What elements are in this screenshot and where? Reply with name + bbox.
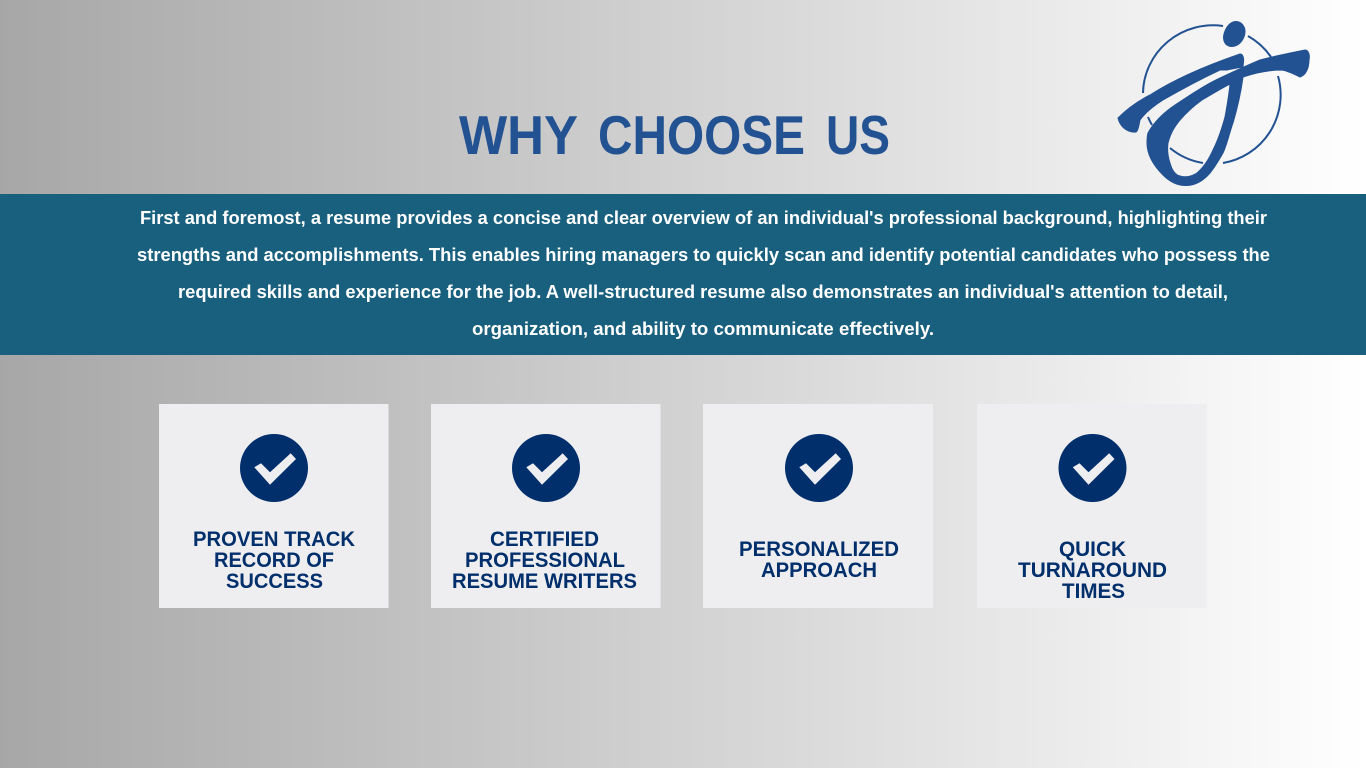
icon: check circle — [1058, 434, 1126, 502]
icon: check circle — [785, 434, 853, 502]
logo: ring arcs — [1143, 25, 1281, 163]
logo: dot — [1223, 21, 1246, 47]
description text: required skills and experience for the job. A well-structured resume also demonstrates an individual's attention to detail, — [178, 281, 1228, 302]
icon: check circle — [512, 434, 580, 502]
card: quick turnaround times — [977, 404, 1206, 608]
card label: APPROACH — [761, 559, 877, 582]
icon: check circle — [240, 434, 308, 502]
title: CHOOSE — [598, 104, 805, 166]
card label: TIMES — [1062, 580, 1125, 603]
card label: TURNAROUND — [1018, 559, 1167, 582]
card label: SUCCESS — [226, 570, 323, 593]
card label: CERTIFIED — [490, 528, 599, 551]
description text: strengths and accomplishments. This enables hiring managers to quickly scan and identify potential candidates who possess the — [137, 244, 1270, 265]
description text: organization, and ability to communicate effectively. — [472, 318, 934, 339]
description text — [137, 207, 1270, 339]
logo: J swoosh — [1147, 50, 1309, 186]
card label: RESUME WRITERS — [452, 570, 637, 593]
card label: PROVEN TRACK — [193, 528, 355, 551]
card label — [452, 528, 637, 593]
card label: PERSONALIZED — [739, 538, 899, 561]
card: personalized approach — [703, 404, 933, 608]
card label — [739, 538, 899, 582]
card label: RECORD OF — [214, 549, 334, 572]
title: WHY — [459, 104, 578, 166]
card label: QUICK — [1059, 538, 1126, 561]
logo: left swoosh — [1118, 54, 1244, 132]
card label — [193, 528, 355, 593]
card label: PROFESSIONAL — [465, 549, 625, 572]
description text: First and foremost, a resume provides a concise and clear overview of an individual's professional background, highlighting their — [140, 207, 1267, 228]
title: US — [826, 104, 890, 166]
card: certified professional resume writers — [431, 404, 660, 608]
logo — [1118, 21, 1309, 186]
description band — [0, 194, 1366, 355]
title — [459, 104, 890, 166]
card: proven track record of success — [159, 404, 388, 608]
card label — [1018, 538, 1167, 603]
